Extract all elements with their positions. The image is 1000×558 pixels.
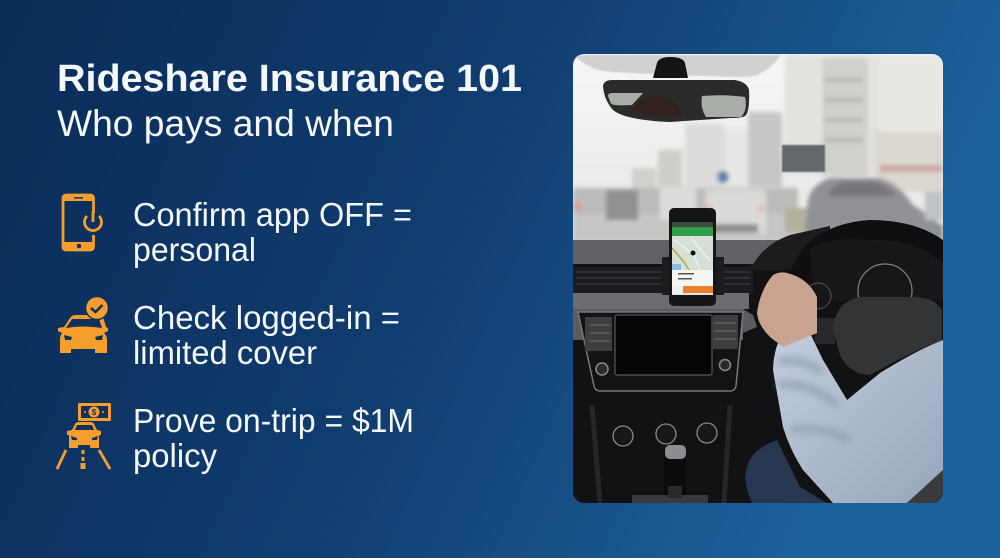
- jeans: [745, 440, 827, 503]
- windshield street scene: [573, 54, 943, 244]
- sun visor: [575, 55, 781, 77]
- text: personal: [133, 231, 256, 268]
- photo: driver in car with phone mount: [573, 54, 943, 506]
- icon: car on road with money: $: [92, 408, 97, 417]
- driver hand: [757, 272, 817, 347]
- icon: car with check badge: [58, 296, 108, 353]
- steering wheel: [787, 220, 943, 375]
- title: Rideshare Insurance 101: [57, 58, 522, 100]
- dashboard: [573, 226, 943, 506]
- text: prove on-trip: Prove on-trip = $1M: [133, 402, 414, 439]
- subtitle: Who pays and when: [57, 103, 394, 144]
- text: confirm app off: Confirm app OFF =: [133, 196, 412, 233]
- text: policy: [133, 437, 217, 474]
- driver sleeve: [773, 333, 943, 503]
- rearview mirror: [603, 57, 749, 122]
- icon: phone with power symbol: [63, 195, 101, 250]
- phone in mount: [662, 208, 724, 306]
- icon: car on road with money: [57, 403, 111, 469]
- dark seat corner: [907, 470, 943, 503]
- text: limited cover: [133, 334, 317, 371]
- text: check logged-in: Check logged-in =: [133, 299, 400, 336]
